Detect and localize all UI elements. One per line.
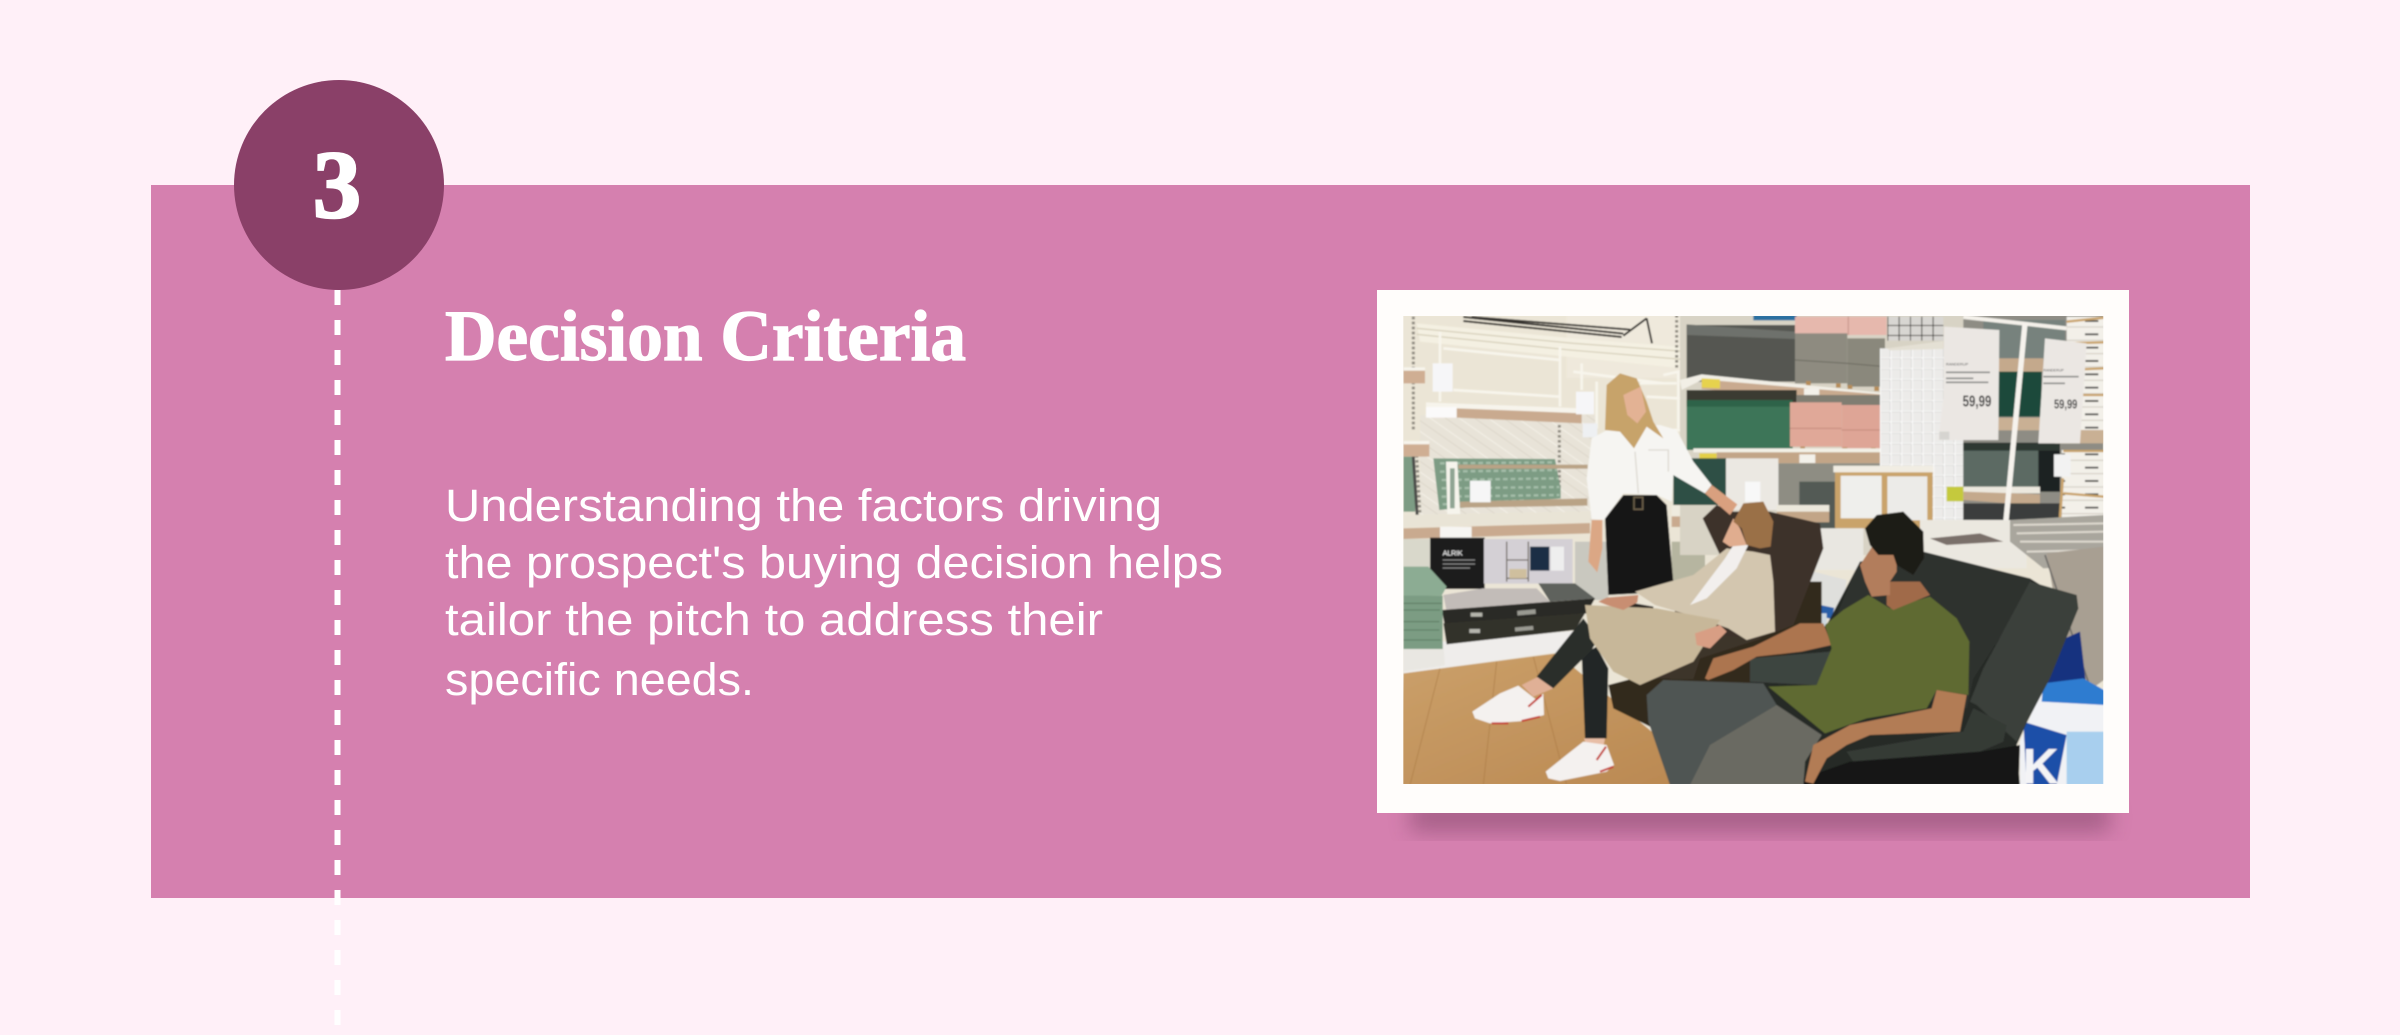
body text: Understanding the factors driving: [445, 480, 1162, 531]
body text: tailor the pitch to address their: [445, 594, 1103, 645]
seated man: [1647, 512, 1969, 785]
man's armchair: [1750, 552, 2078, 785]
body text: specific needs.: [445, 654, 754, 705]
store wall and left shelving: [1400, 315, 2104, 785]
price signs: RANDERUP: [2043, 369, 2064, 373]
ALRIK boxes: ALRIK: [1443, 549, 1463, 558]
price signs: 59,99: [2054, 396, 2077, 411]
floor and base plinth: [1400, 542, 1717, 785]
photo frame shadow: [1410, 802, 2110, 832]
dashed connector line: [334, 290, 340, 1035]
ALRIK boxes: [1403, 538, 1595, 649]
price signs: [1939, 316, 2088, 521]
heading: Decision Criteria: Decision Criteria: [445, 296, 966, 376]
right background shelving and slatted unit: [1947, 315, 2104, 528]
step number badge: [234, 80, 444, 290]
display table, white boxes and bag: [1797, 515, 2104, 795]
panel: decision criteria card: [151, 185, 2250, 898]
seated woman: [1472, 502, 1775, 781]
price signs: RANDERUP: [1946, 362, 1969, 367]
wire grid panel and wooden frame: [1833, 317, 1963, 528]
woman's armchair: [1603, 505, 1823, 727]
infographic canvas: [151, 80, 2250, 1025]
right shelves with storage boxes: [1672, 316, 1964, 556]
body text: the prospect's buying decision helps: [445, 537, 1223, 588]
price signs: 59,99: [1963, 394, 1991, 411]
photo: customers testing armchairs in a furniture store: [1400, 315, 2104, 795]
step number badge: 3: [313, 131, 361, 238]
body text: [445, 480, 1223, 705]
display table, white boxes and bag: K: [2023, 739, 2059, 795]
photo frame: [1377, 290, 2129, 813]
standing woman: [1587, 373, 1737, 595]
